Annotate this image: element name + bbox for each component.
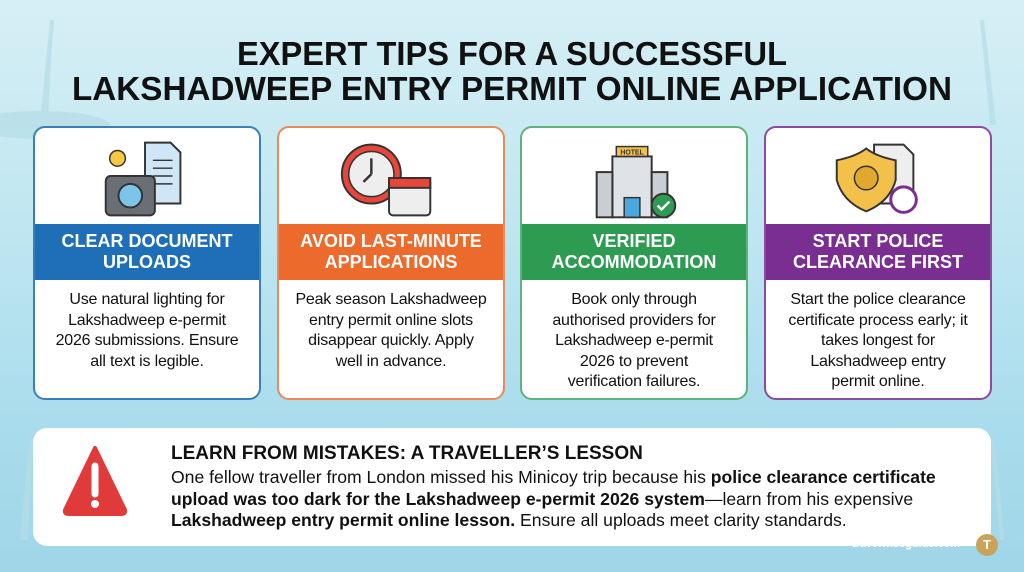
title: EXPERT TIPS FOR A SUCCESSFUL <box>237 35 787 72</box>
panel: verified accommodation <box>520 126 748 400</box>
heading band: START POLICE <box>813 231 943 251</box>
text block: takes longest for <box>821 332 935 349</box>
heading band: APPLICATIONS <box>325 252 457 272</box>
heading band: CLEAR DOCUMENT <box>62 231 232 251</box>
icon: hotel with check <box>596 146 676 218</box>
text block: Start the police clearance <box>790 291 966 308</box>
icon: clock and calendar <box>340 144 432 216</box>
text block: 2026 submissions. Ensure <box>56 332 238 349</box>
callout heading: LEARN FROM MISTAKES: A TRAVELLER’S LESSON <box>171 443 643 464</box>
text block: Lakshadweep e-permit <box>68 312 226 328</box>
title: LAKSHADWEEP ENTRY PERMIT ONLINE APPLICATION <box>72 70 952 107</box>
heading band <box>766 224 990 280</box>
icon: logo <box>976 534 998 556</box>
heading band: CLEARANCE FIRST <box>793 252 963 272</box>
icon: logo: T <box>983 537 991 552</box>
callout text: upload was too dark for the Lakshadweep e-permit 2026 system—learn from his expensive <box>171 488 913 508</box>
heading band: UPLOADS <box>103 252 191 272</box>
icon: warning triangle <box>62 446 128 516</box>
heading band <box>279 224 503 280</box>
text block: permit online. <box>831 373 925 390</box>
title <box>72 35 952 107</box>
text block: certificate process early; it <box>788 312 968 328</box>
text block: 2026 to prevent <box>580 352 688 370</box>
panel: clear document uploads <box>33 126 261 400</box>
callout text: Lakshadweep entry permit online lesson. Ensure all uploads meet clarity standards. <box>171 510 847 530</box>
text block: Lakshadweep entry <box>810 352 946 370</box>
watermark: travelwiseguide.com <box>852 538 960 550</box>
heading band: VERIFIED <box>592 231 676 251</box>
text block: authorised providers for <box>552 312 716 328</box>
panel: avoid last-minute <box>277 126 505 400</box>
text block: well in advance. <box>336 352 446 370</box>
text block <box>552 291 716 390</box>
icon: hotel with check: HOTEL <box>620 149 644 156</box>
text block: disappear quickly. Apply <box>308 332 474 349</box>
heading band <box>522 224 746 280</box>
heading band <box>35 224 259 280</box>
icon: camera and document <box>104 142 182 216</box>
text block: verification failures. <box>568 373 700 390</box>
heading band: AVOID LAST-MINUTE <box>300 231 482 251</box>
callout: learn from mistakes <box>33 428 991 546</box>
text block: Peak season Lakshadweep <box>295 291 487 308</box>
text block: Book only through <box>571 291 697 308</box>
text block: Lakshadweep e-permit <box>555 332 713 349</box>
text block: entry permit online slots <box>309 312 473 328</box>
text block: all text is legible. <box>90 352 204 370</box>
text block <box>56 291 238 370</box>
text block <box>788 291 968 390</box>
text block <box>295 291 487 370</box>
text block: Use natural lighting for <box>69 291 225 308</box>
callout text: One fellow traveller from London missed his Minicoy trip because his police clearance certificate <box>171 467 936 487</box>
callout text <box>171 467 936 530</box>
heading band: ACCOMMODATION <box>552 252 716 272</box>
icon: badge and document <box>836 144 918 214</box>
panel: police clearance <box>764 126 992 400</box>
